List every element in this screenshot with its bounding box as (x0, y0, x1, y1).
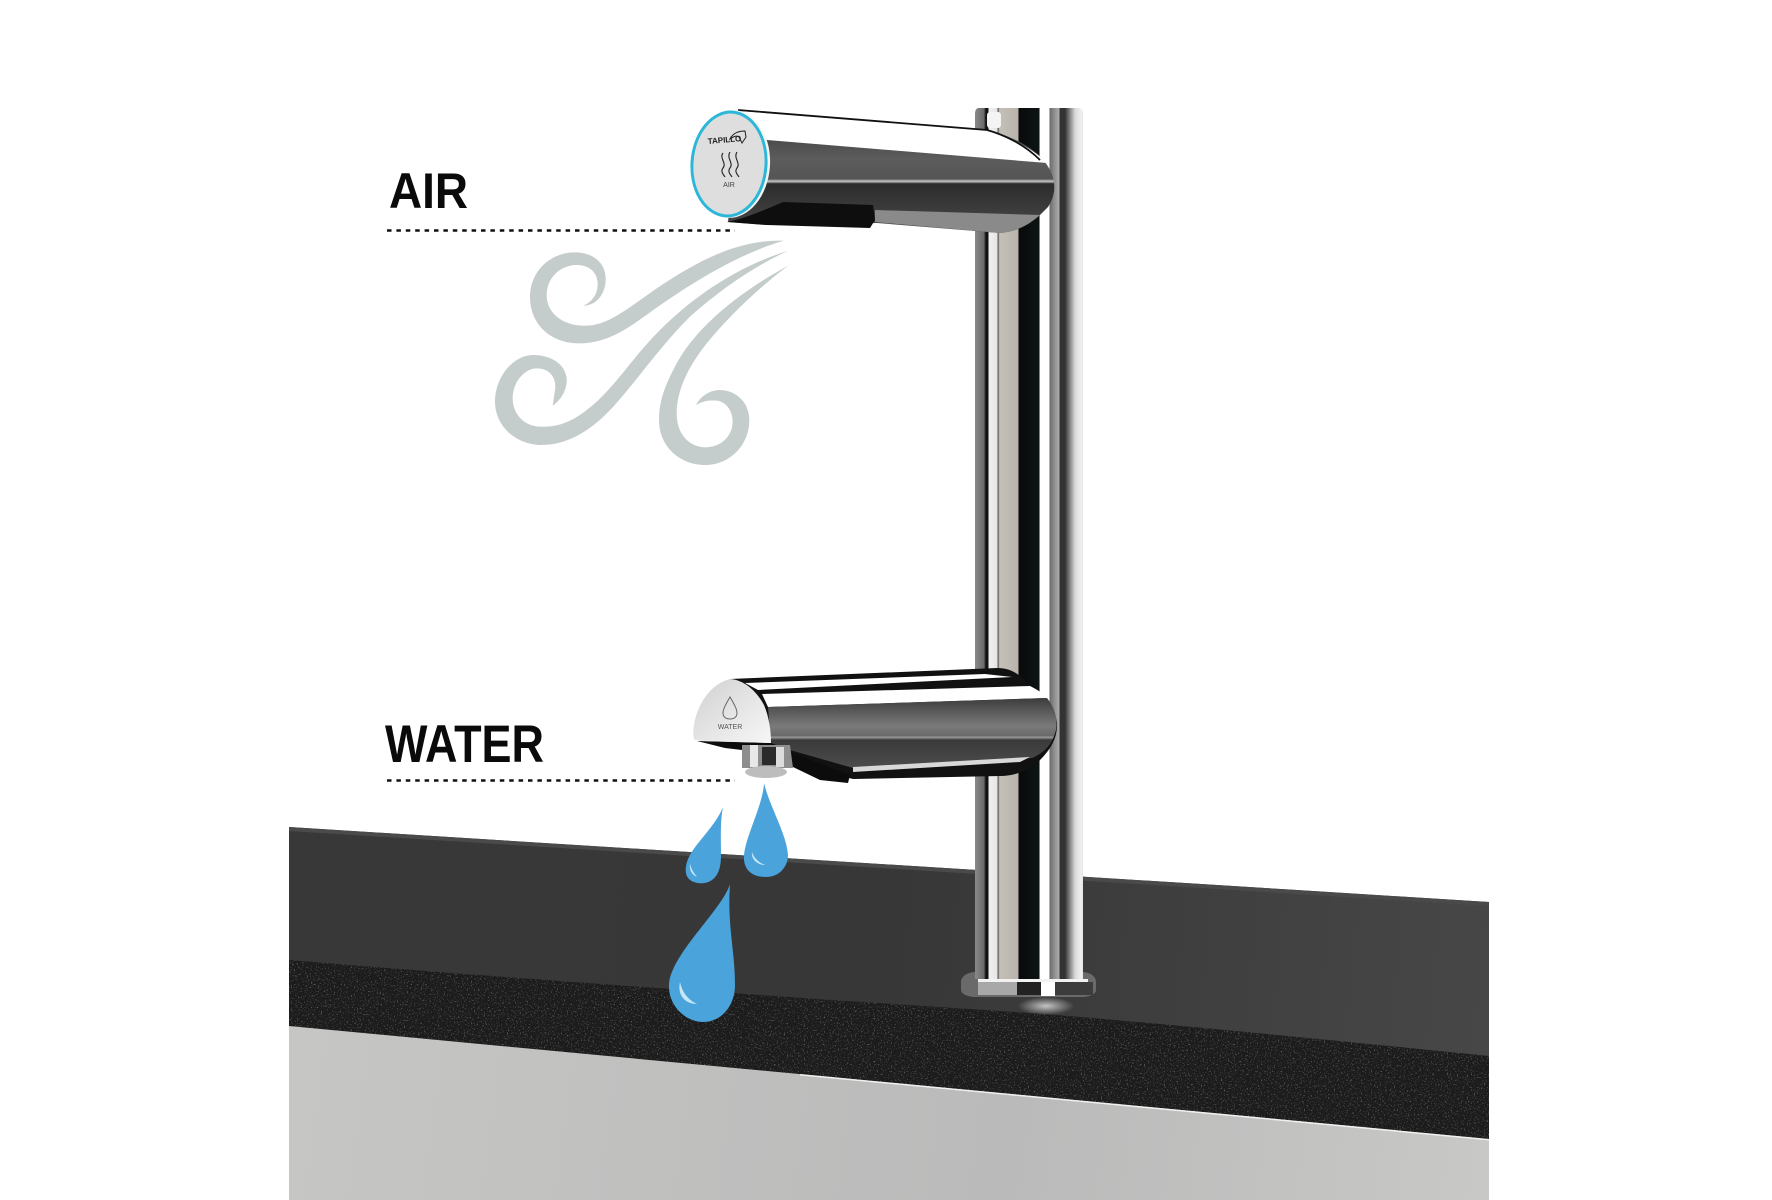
icon: wind swirls (495, 241, 788, 465)
horse logo (730, 131, 746, 143)
middle white highlight (762, 686, 1047, 707)
air label on head: AIR (723, 182, 735, 189)
counter back edge strip (289, 827, 1489, 906)
spout silhouette (730, 668, 1057, 779)
water spout (693, 668, 1057, 783)
upper swirl (530, 241, 784, 343)
countertop and cabinet (289, 827, 1489, 1200)
faucet pipe and base (961, 108, 1096, 997)
brushed barrel (768, 698, 1057, 768)
top white highlight (740, 111, 1047, 163)
counter edge highlight (800, 1074, 1489, 1140)
lower lip highlight (853, 757, 1030, 772)
counter front edge (289, 960, 1489, 1139)
lower swirl (495, 251, 788, 445)
counter top surface (289, 827, 1489, 1060)
lower lip highlight (875, 210, 1040, 233)
droplet icon (723, 697, 737, 719)
brand text: TAPILLO (707, 134, 742, 146)
head face with cyan ring (688, 107, 774, 221)
black wing (697, 741, 850, 783)
left drop (686, 807, 723, 883)
pipe column (975, 108, 1083, 979)
spout barrel (728, 110, 1054, 233)
aerator (742, 745, 793, 778)
shield face (693, 679, 771, 743)
right drop (744, 783, 788, 877)
air vent (727, 202, 875, 228)
water label on head: WATER (718, 724, 742, 731)
air spout (688, 107, 1054, 233)
label: water: WATER (385, 715, 544, 774)
label: air: AIR (389, 163, 468, 219)
right swirl (659, 266, 788, 465)
reflection on counter (1018, 997, 1074, 1015)
base ring (961, 972, 1096, 997)
icon: water drops (669, 783, 788, 1022)
pipe cap highlight (987, 112, 1001, 128)
upper white highlight (745, 674, 1012, 690)
cabinet wall (289, 1020, 1489, 1200)
air waves icon (722, 152, 739, 177)
top black line (738, 110, 1040, 160)
large drop (669, 884, 735, 1022)
